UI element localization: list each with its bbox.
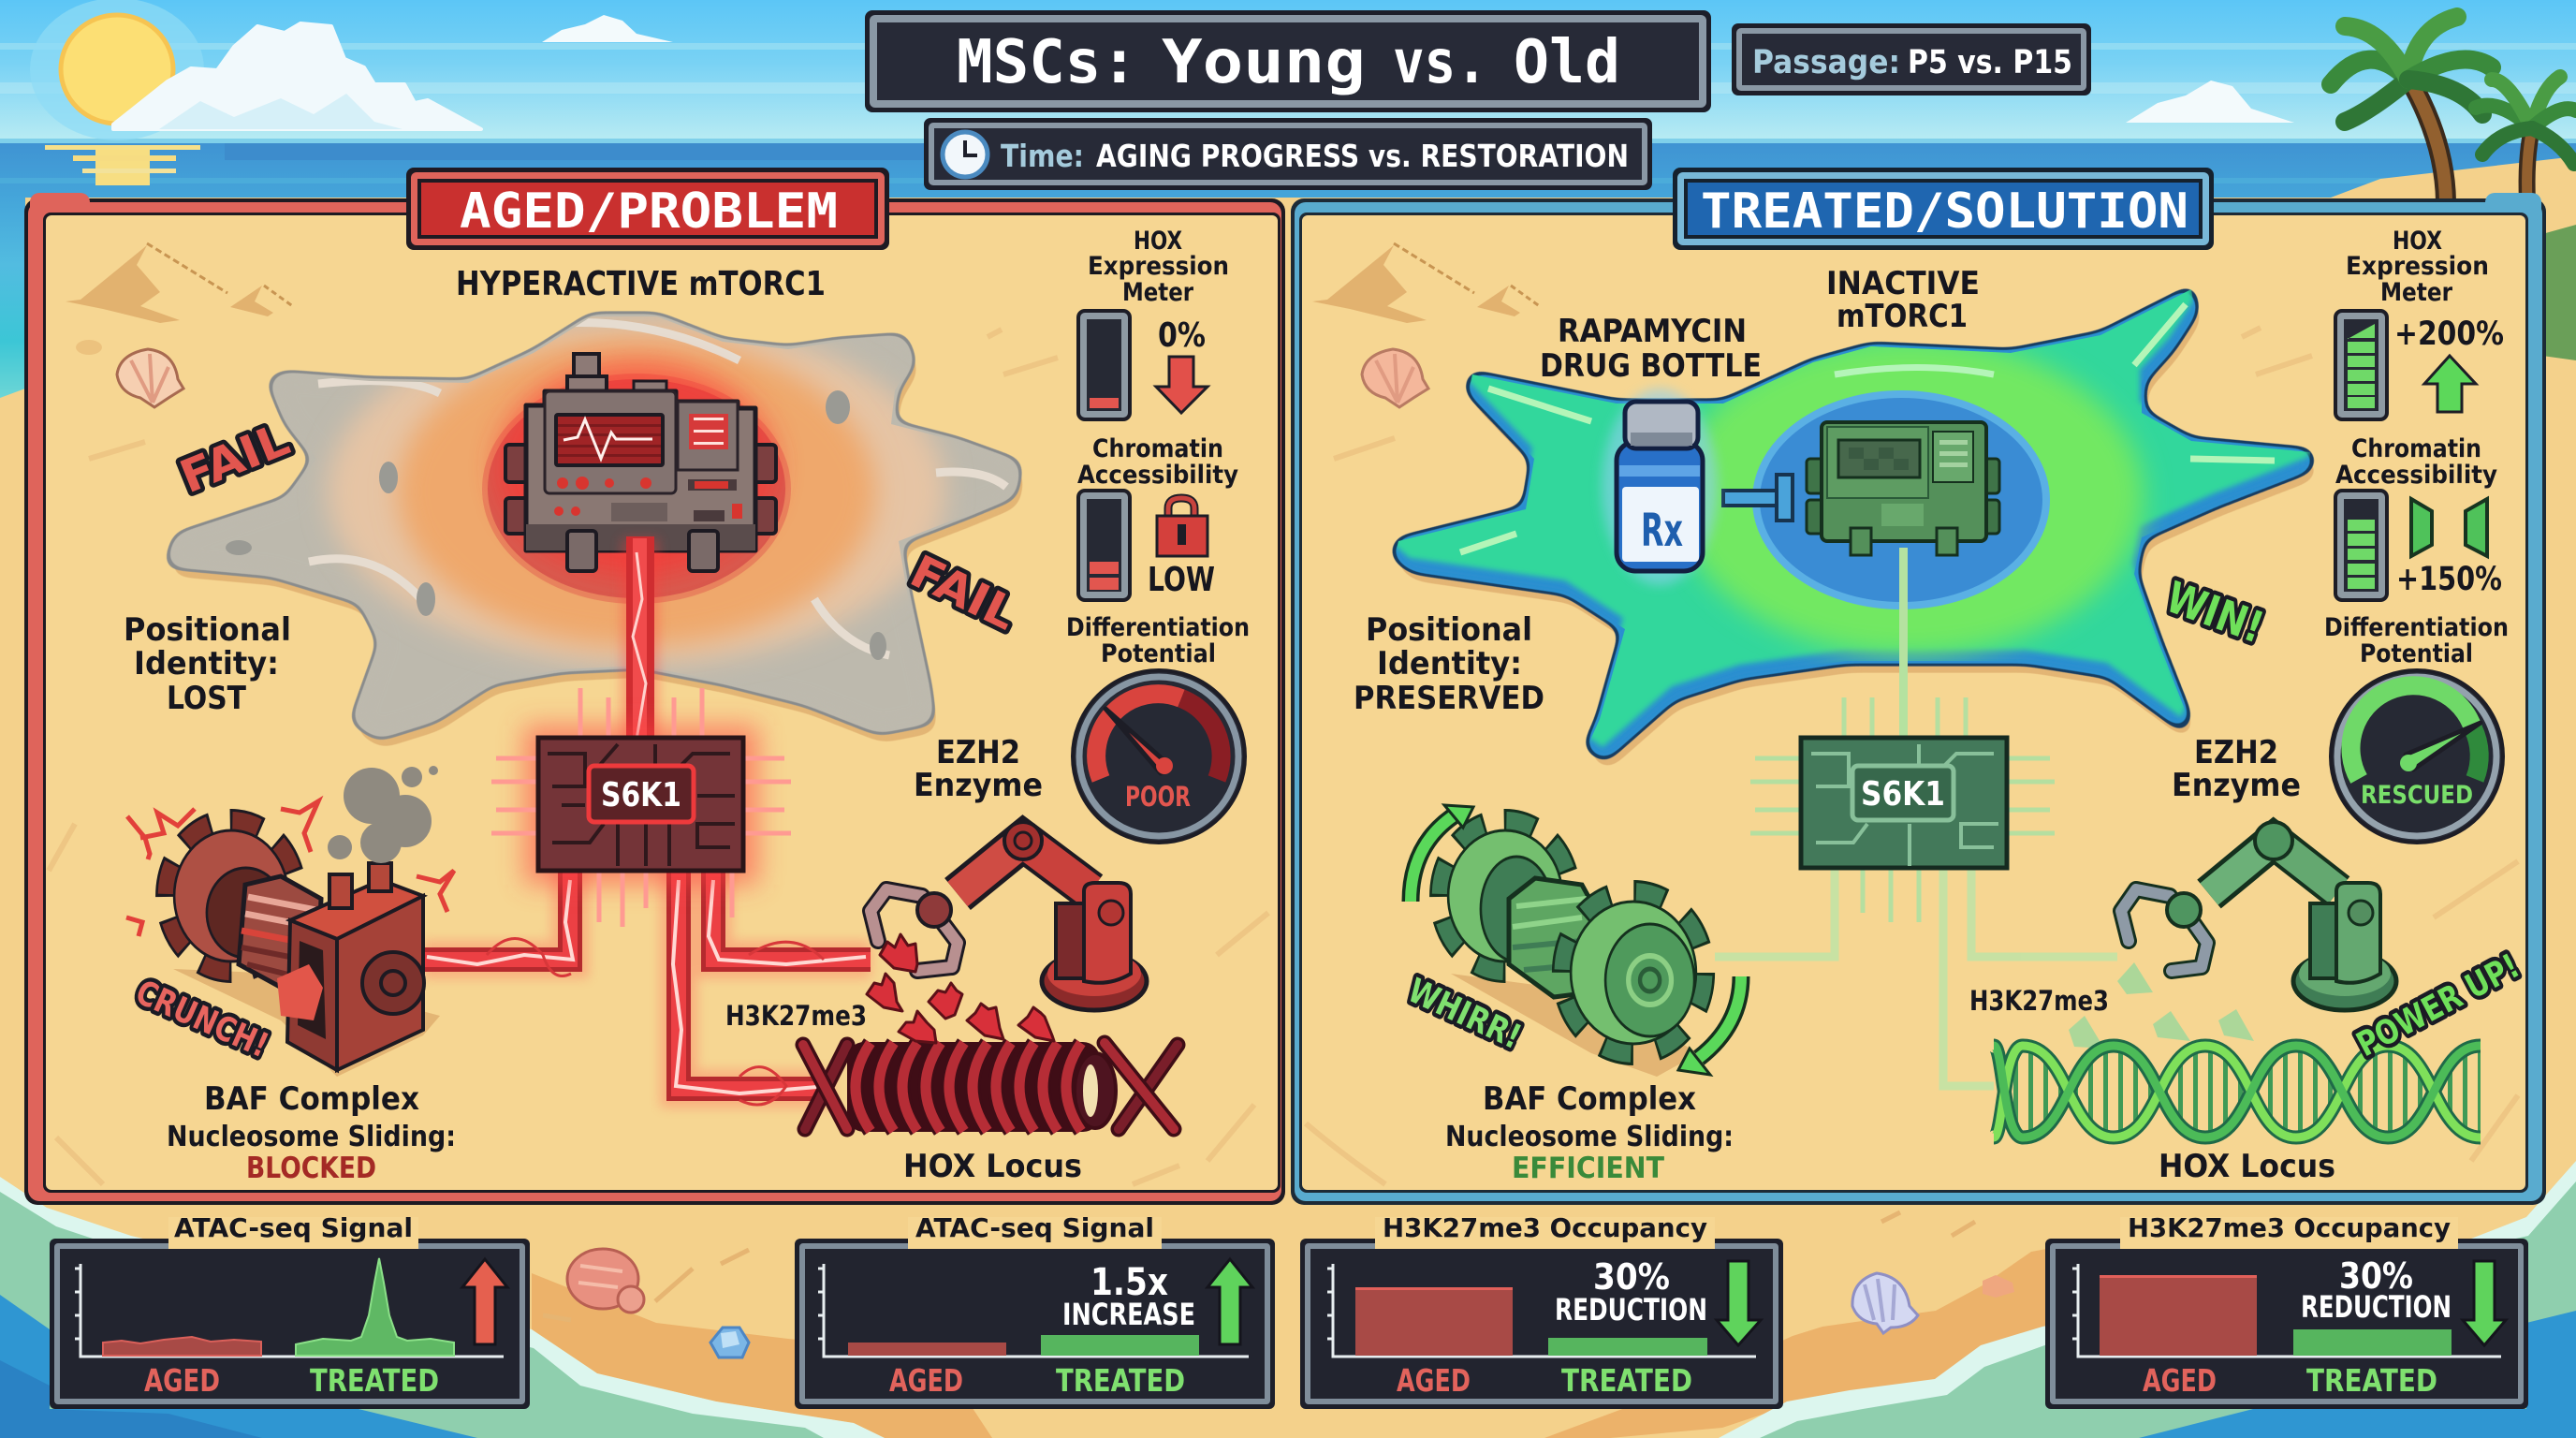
beam: mTORC1 to S6K1 xyxy=(622,536,659,744)
marks: H3K27me3 strawberries xyxy=(867,934,1054,1043)
label: EZH2 treated xyxy=(2172,734,2301,804)
label: Potential xyxy=(2360,639,2473,668)
sand shell lower left xyxy=(567,1249,644,1313)
rotation arrow bottom xyxy=(1699,976,1741,1058)
value 30%: 30% xyxy=(2339,1255,2413,1297)
axis label aged: AGED xyxy=(889,1362,963,1399)
value reduction: REDUCTION xyxy=(2301,1289,2452,1325)
marks: fading H3K27me3 xyxy=(2069,962,2254,1049)
chip: S6K1 treated xyxy=(1750,697,2055,922)
label: inactive mTORC1: INACTIVE xyxy=(1826,265,1980,302)
time box xyxy=(924,118,1652,190)
label: Expression xyxy=(2346,252,2489,281)
label: inactive mTORC1 xyxy=(1826,265,1980,335)
arrow up xyxy=(2424,356,2476,412)
icon: open doors xyxy=(2411,499,2487,556)
label: rapamycin drug bottle: DRUG BOTTLE xyxy=(1540,347,1762,385)
callout: fail 1: FAIL xyxy=(173,413,297,504)
chart title: H3K27me3 Occupancy xyxy=(2128,1212,2451,1243)
label xyxy=(2324,613,2509,668)
HOX locus open DNA xyxy=(1994,1046,2481,1137)
label: Meter xyxy=(2380,278,2453,307)
label: H3K27me3 aged: H3K27me3 xyxy=(725,1000,867,1032)
label: BAF aged: BAF Complex xyxy=(204,1080,419,1118)
time value: AGING PROGRESS vs. RESTORATION xyxy=(1096,138,1629,174)
axes xyxy=(1327,1264,1756,1357)
label: H3K27me3 treated: H3K27me3 xyxy=(1969,985,2109,1017)
axes xyxy=(818,1264,1249,1357)
treated bar xyxy=(1548,1338,1707,1356)
complex: BAF gears spinning xyxy=(1411,805,1741,1077)
gauge value RESCUED: RESCUED xyxy=(2361,781,2473,810)
rotation arrow top xyxy=(1411,813,1458,902)
label: HOX xyxy=(1134,227,1182,256)
clouds xyxy=(113,15,2294,129)
label: positional identity lost: LOST xyxy=(167,680,247,717)
robotic arm: EZH2 aged xyxy=(871,822,1147,1010)
banner: treated solution xyxy=(1673,168,2214,250)
label: BAF treated xyxy=(1445,1080,1734,1185)
label xyxy=(1077,434,1238,490)
axis label aged: AGED xyxy=(144,1362,220,1399)
label xyxy=(1088,227,1229,307)
label: BAF aged xyxy=(167,1080,456,1185)
shell aged xyxy=(117,349,183,407)
panel: treated solution xyxy=(1291,168,2546,1205)
axes xyxy=(2072,1264,2501,1357)
cell: healthy treated cell xyxy=(1393,278,2314,768)
panel frame aged xyxy=(24,193,1285,1205)
label: rapamycin drug bottle: RAPAMYCIN xyxy=(1558,313,1747,350)
label: Differentiation xyxy=(1066,613,1250,642)
label: EZH2 aged: Enzyme xyxy=(914,767,1043,804)
label: Chromatin xyxy=(2351,434,2481,463)
callout: crunch: CRUNCH! xyxy=(130,974,274,1065)
value 30%: 30% xyxy=(1593,1256,1670,1298)
label: HOX locus treated: HOX Locus xyxy=(2159,1148,2335,1185)
icon: lock xyxy=(1157,498,1208,556)
label: Potential xyxy=(1101,639,1216,668)
label: BAF aged: Nucleosome Sliding: xyxy=(167,1121,456,1153)
arrow up green xyxy=(1208,1259,1252,1344)
label: positional identity lost xyxy=(124,611,291,717)
axis label treated: TREATED xyxy=(1056,1362,1185,1399)
sand dunes treated xyxy=(1312,243,1541,323)
title text: MSCs: xyxy=(957,28,1137,97)
chart: ATAC-seq signal 1.5x xyxy=(795,1212,1275,1409)
passage label: Passage: xyxy=(1752,44,1900,81)
meter: HOX expression treated xyxy=(2335,227,2504,419)
label: positional identity lost: Positional xyxy=(124,611,291,649)
label: Meter xyxy=(1122,278,1194,307)
sand marks xyxy=(543,1212,1975,1320)
aged bar xyxy=(848,1343,1006,1356)
HOX locus coil aged xyxy=(803,1042,1178,1132)
treated peak xyxy=(296,1258,454,1356)
title text: vs. xyxy=(1393,28,1487,97)
icon: rapamycin bottle xyxy=(1602,389,1718,585)
value 1.5x: 1.5x xyxy=(1090,1261,1168,1304)
gauge value POOR: POOR xyxy=(1125,781,1191,813)
axes xyxy=(75,1264,504,1357)
palm tree small xyxy=(2476,77,2576,201)
label: BAF treated: Nucleosome Sliding: xyxy=(1445,1121,1734,1153)
label: EZH2 aged xyxy=(914,734,1043,804)
callout: whirr: WHIRR! xyxy=(1402,972,1527,1057)
beam: faint mTORC1 to S6K1 xyxy=(1899,548,1908,740)
panel frame treated xyxy=(1291,193,2546,1205)
treated bar xyxy=(2293,1329,2452,1356)
axis label aged: AGED xyxy=(1397,1362,1471,1399)
callout: fail 2: FAIL xyxy=(902,545,1025,640)
chart: H3K27me3 occupancy A xyxy=(1300,1212,1783,1409)
background: sky xyxy=(0,0,2576,140)
label: HOX xyxy=(2393,227,2442,256)
sand dunes aged xyxy=(66,243,294,355)
chip: S6K1 aged xyxy=(491,688,791,927)
complex: BAF gears jammed xyxy=(126,766,454,1077)
value increase: INCREASE xyxy=(1062,1297,1195,1332)
value +150%: +150% xyxy=(2396,561,2502,598)
label xyxy=(1066,613,1250,668)
gauge: differentiation potential aged xyxy=(1066,613,1250,843)
sparks xyxy=(126,801,454,936)
title box xyxy=(865,10,1711,112)
label: HOX locus aged: HOX Locus xyxy=(903,1148,1082,1185)
gauge: differentiation potential treated xyxy=(2324,613,2509,843)
label: Differentiation xyxy=(2324,613,2509,642)
arrow head bottom xyxy=(1678,1049,1710,1075)
icon: sun xyxy=(30,0,204,185)
label: positional identity preserved: PRESERVED xyxy=(1354,680,1544,717)
meter: chromatin accessibility aged xyxy=(1077,434,1238,600)
label: BAF aged: BLOCKED xyxy=(246,1152,376,1185)
chart: H3K27me3 occupancy B xyxy=(2045,1212,2528,1409)
label: Accessibility xyxy=(2335,461,2497,490)
arrow up red xyxy=(462,1259,507,1344)
background: shoreline water left xyxy=(0,1177,992,1438)
treated bar xyxy=(1041,1335,1199,1356)
value LOW: LOW xyxy=(1148,561,1215,599)
arrow down green xyxy=(1717,1261,1761,1345)
label xyxy=(2335,434,2497,490)
background: sea xyxy=(0,139,2576,419)
axis label treated: TREATED xyxy=(2306,1362,2437,1399)
label: inactive mTORC1: mTORC1 xyxy=(1837,298,1968,335)
chart title: H3K27me3 Occupancy xyxy=(1383,1212,1707,1243)
chip label S6K1 treated: S6K1 xyxy=(1861,775,1945,814)
palm bushes right edge xyxy=(2542,225,2576,360)
chart title: ATAC-seq Signal xyxy=(915,1212,1154,1243)
label: EZH2 aged: EZH2 xyxy=(936,734,1020,771)
axis label treated: TREATED xyxy=(1561,1362,1692,1399)
callout: power up: POWER UP! xyxy=(2350,947,2525,1064)
purple shell on sand xyxy=(1852,1273,1918,1333)
banner: aged problem xyxy=(406,168,889,250)
label: rapamycin drug bottle xyxy=(1540,313,1762,385)
label: EZH2 treated: Enzyme xyxy=(2172,767,2301,804)
label: positional identity lost: Identity: xyxy=(134,645,279,682)
banner text: AGED/PROBLEM xyxy=(460,183,838,240)
aged bar xyxy=(2100,1275,2257,1356)
chart title: ATAC-seq Signal xyxy=(174,1212,413,1243)
label: positional identity preserved: Identity: xyxy=(1377,645,1522,682)
label: Accessibility xyxy=(1077,461,1238,490)
label: BAF treated: BAF Complex xyxy=(1483,1080,1696,1118)
nucleus treated xyxy=(1756,394,2046,606)
callout: win: WIN! xyxy=(2159,571,2270,653)
time label: Time: xyxy=(1001,138,1084,174)
passage value: P5 vs. P15 xyxy=(1908,44,2072,81)
label: positional identity preserved xyxy=(1354,611,1544,717)
label: BAF treated: EFFICIENT xyxy=(1512,1152,1664,1185)
arrow head top xyxy=(1444,805,1473,828)
value reduction: REDUCTION xyxy=(1555,1292,1707,1328)
axis label treated: TREATED xyxy=(310,1362,439,1399)
background: shoreline water right xyxy=(1544,1161,2576,1438)
label: hyperactive mTORC1: HYPERACTIVE mTORC1 xyxy=(456,265,826,303)
machine: inactive mTORC1 xyxy=(1807,422,1999,555)
chart: ATAC-seq signal peak xyxy=(50,1212,530,1409)
smoke xyxy=(328,766,438,863)
panel: aged problem xyxy=(24,168,1285,1205)
axis label aged: AGED xyxy=(2143,1362,2217,1399)
passage box xyxy=(1732,23,2091,95)
palm tree large xyxy=(2331,17,2492,201)
small orange shell on sand xyxy=(1983,1275,2014,1298)
inhibitor T-bar xyxy=(1723,475,1793,521)
meter: chromatin accessibility treated xyxy=(2335,434,2502,600)
cell: senescent aged cell xyxy=(168,316,1022,746)
shell treated xyxy=(1362,349,1428,407)
nucleus aged xyxy=(485,376,788,601)
title text: Young xyxy=(1162,28,1366,97)
title text xyxy=(957,28,1620,97)
label xyxy=(2346,227,2489,307)
aged bar xyxy=(1355,1287,1513,1356)
arrow down green xyxy=(2463,1261,2506,1345)
chip label S6K1 aged: S6K1 xyxy=(601,776,681,814)
pipes: S6K1 outputs treated xyxy=(1715,866,2117,1086)
value +200%: +200% xyxy=(2394,315,2504,353)
title text: Old xyxy=(1514,28,1620,97)
label: Expression xyxy=(1088,252,1229,281)
blue gem on sand xyxy=(710,1328,749,1357)
meter: HOX expression aged xyxy=(1078,227,1229,419)
machine: hyperactive mTORC1 xyxy=(496,354,777,576)
aged noise bar xyxy=(103,1337,261,1356)
label: EZH2 treated: EZH2 xyxy=(2194,734,2278,771)
label: Chromatin xyxy=(1092,434,1223,463)
label: positional identity preserved: Positional xyxy=(1366,611,1532,649)
value 0%: 0% xyxy=(1158,316,1206,355)
robotic arm: EZH2 treated xyxy=(2121,822,2396,1010)
arrow down xyxy=(1156,357,1208,413)
pipes: S6K1 outputs aged xyxy=(423,866,871,1105)
icon: clock xyxy=(943,132,988,177)
bottle Rx label: Rx xyxy=(1641,505,1683,557)
banner text: TREATED/SOLUTION xyxy=(1701,183,2188,240)
